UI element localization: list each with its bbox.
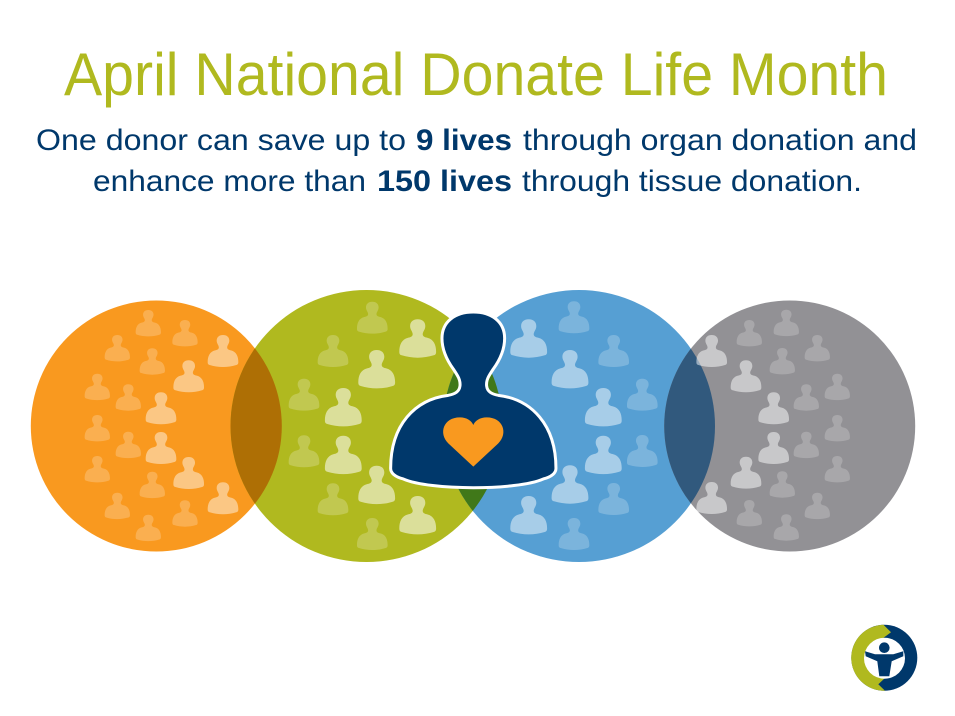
subtitle: enhance more than xyxy=(93,165,366,198)
people: blue circle xyxy=(510,301,658,550)
subtitle: 150 lives xyxy=(377,165,512,198)
icon: heart xyxy=(443,417,503,467)
people: orange circle xyxy=(85,310,238,541)
circle: orange xyxy=(31,300,282,552)
overlapping circles xyxy=(31,290,915,562)
people: gray circle xyxy=(696,310,850,541)
logo figure xyxy=(865,642,903,676)
logo xyxy=(851,625,917,691)
circle: green xyxy=(230,290,502,562)
people: green circle xyxy=(289,302,436,550)
overlap: green and blue xyxy=(446,372,499,511)
title: April National Donate Life Month xyxy=(64,41,888,108)
overlap: orange and green xyxy=(230,348,282,504)
subtitle xyxy=(36,124,917,198)
subtitle: One donor can save up to xyxy=(36,124,406,157)
circle: gray xyxy=(664,300,915,552)
subtitle: through organ donation and xyxy=(523,124,917,157)
subtitle: 9 lives xyxy=(416,124,512,157)
circle: blue xyxy=(443,290,715,562)
central donor figure xyxy=(391,312,556,488)
subtitle: through tissue donation. xyxy=(522,165,862,198)
overlap: blue and gray xyxy=(664,348,715,504)
